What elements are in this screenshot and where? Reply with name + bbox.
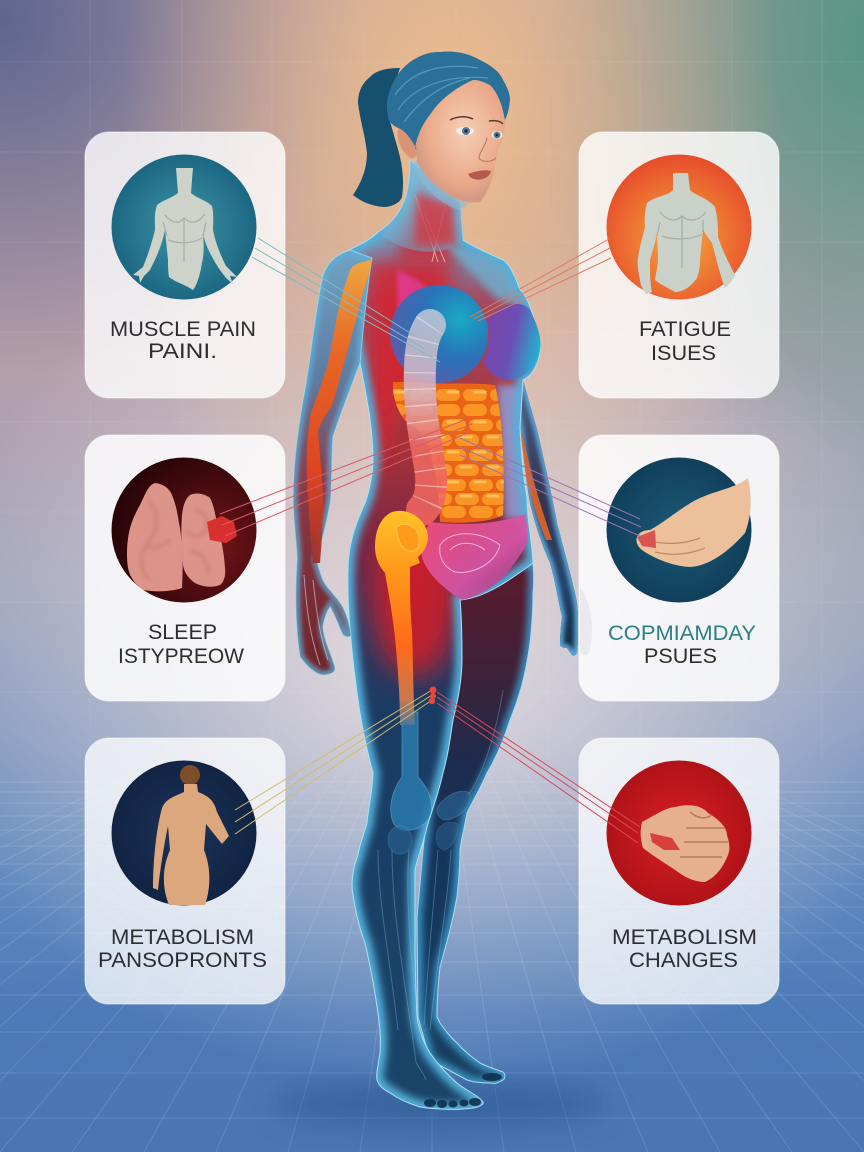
nose [479,138,496,161]
chest red [370,262,450,470]
icon: fist [641,805,729,882]
connectors: fatigue [470,239,611,321]
label: sleep: SLEEP [148,621,217,644]
breast right [483,304,541,380]
label: fatigue: FATIGUE [639,318,731,341]
label: fatigue: ISUES [651,342,716,365]
pelvis [422,514,527,600]
brows [450,117,503,124]
connectors: muscle pain [252,238,440,362]
label: daily issues: PSUES [644,645,717,668]
face [415,80,505,202]
eyes [456,127,502,139]
label: daily issues [608,622,756,668]
label: metabolism pansoponts: PANSOPRONTS [98,949,267,972]
connector nodes [429,686,436,704]
connectors: metabolism right [437,692,640,843]
connector lines [220,238,642,843]
toes [424,1073,502,1108]
connectors: sleep [220,418,472,536]
icon: hand [636,478,751,567]
right flank blue [497,385,535,520]
right knee [436,791,470,850]
intestines [390,380,506,526]
pink chest [394,269,428,312]
label: muscle pain [110,318,256,363]
label: muscle pain: PAINI. [148,340,217,363]
neck red glow [415,190,456,245]
colon tube [420,325,431,510]
ghost hand [580,587,592,655]
shoulders blue [444,243,526,307]
hair [387,51,510,150]
floor grid [0,782,864,1152]
label: sleep [118,621,244,668]
label: muscle pain: MUSCLE PAIN [110,318,256,341]
chin shadow [413,160,470,210]
label: sleep: ISTYPREOW [118,645,244,668]
neck nerves [415,195,445,262]
knees [391,712,431,830]
lips [468,170,491,180]
panel: fatigue [579,132,779,398]
right arm [520,380,578,656]
head [353,51,510,252]
panel: muscle pain [85,132,285,398]
panel: metabolism changes [579,738,779,1004]
icon: pale torso [638,173,735,294]
torso and left leg [335,160,540,1109]
right leg [417,560,534,1083]
neck red [395,195,456,262]
hip glow [373,522,457,678]
label: metabolism pansoponts: METABOLISM [111,926,254,949]
icon: back view figure [153,765,229,905]
icon: lungs [127,483,237,591]
left arm [293,250,372,675]
label: daily issues: COPMIAMDAY [608,622,756,645]
connectors: metabolism left [235,690,432,834]
label: metabolism changes [612,926,757,972]
rim glow [335,160,540,1109]
figure: human body [293,160,592,1109]
panel: sleep [85,435,285,701]
arm bone stripe [307,260,372,563]
background grid [0,0,864,760]
icon: muscular torso [133,168,237,290]
breast left [390,285,488,383]
panel: metabolism left [85,738,285,1004]
label: metabolism pansoponts [98,926,267,972]
neck [380,158,463,252]
label: fatigue [639,318,731,365]
label: metabolism changes: METABOLISM [612,926,757,949]
ear [398,127,418,158]
label: metabolism changes: CHANGES [629,949,738,972]
connectors: daily issues [460,438,642,537]
leg nerves [378,690,503,1080]
femur bone [375,511,428,725]
hand veins [304,575,328,665]
panel: daily issues [579,435,779,701]
ponytail [353,68,403,207]
hair strands [395,66,488,122]
floor shadow [270,1080,610,1128]
